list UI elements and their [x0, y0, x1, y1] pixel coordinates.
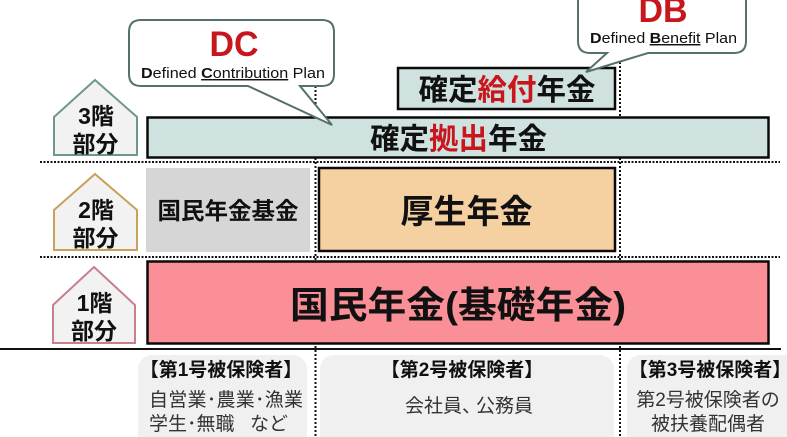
text: 第3号 description: 第2号被保険者の — [636, 389, 780, 411]
icon: house label 2階部分 — [54, 174, 137, 251]
box: 国民年金(基礎年金): 国民年金(基礎年金) — [290, 285, 626, 326]
icon: house label 1階部分 — [53, 267, 135, 344]
heading: 第1号被保険者: 【第1号被保険者】 — [140, 359, 302, 381]
text: 第1号 occupations: など — [250, 413, 288, 435]
panel: 3rd tier — [54, 68, 768, 158]
box: 確定給付年金 — [398, 68, 615, 109]
box: 確定給付年金: 確定給付年金 — [418, 74, 596, 107]
callout: DB — [578, 0, 746, 72]
text: 第2号 occupations: 会社員、 — [405, 396, 481, 417]
panel: 2nd tier — [54, 168, 615, 252]
box: 確定拠出年金: 確定拠出年金 — [370, 123, 547, 156]
text: 第1号 occupations: 学生･無職 — [149, 414, 235, 435]
callout: DC: DC — [210, 25, 258, 64]
callout: DC: Defined Contribution Plan — [141, 66, 325, 82]
box: 国民年金(基礎年金) — [148, 262, 768, 344]
panel: 第2号被保険者 — [320, 355, 614, 437]
text: 第3号 description: 被扶養配偶者 — [651, 413, 765, 435]
text: 第1号 occupations — [149, 389, 303, 435]
box: 確定拠出年金 — [148, 118, 768, 158]
box: 厚生年金 — [319, 168, 615, 251]
icon: house label 2階部分: 2階 — [78, 197, 114, 223]
icon: house label 1階部分: 1階 — [77, 290, 112, 316]
text: 第1号 occupations: 自営業･農業･漁業 — [149, 389, 303, 411]
heading: 第2号被保険者: 【第2号被保険者】 — [381, 359, 543, 381]
text: 第2号 occupations: 公務員 — [476, 395, 533, 417]
box: 国民年金基金: 国民年金基金 — [158, 198, 299, 224]
panel: 1st tier — [53, 262, 768, 344]
icon: house label 3階部分: 3階 — [78, 103, 114, 129]
callout: DC — [129, 20, 334, 125]
text: 第3号 description — [636, 389, 780, 435]
icon: house label 1階部分: 部分 — [71, 318, 117, 344]
box: 国民年金基金 — [146, 168, 310, 252]
icon: house label 3階部分: 部分 — [72, 131, 118, 157]
callout: DB: Defined Benefit Plan — [590, 31, 737, 47]
icon: house label 2階部分: 部分 — [72, 225, 118, 251]
heading: 第3号被保険者: 【第3号被保険者】 — [629, 359, 787, 381]
icon: house label 3階部分 — [54, 80, 137, 157]
panel: 第3号被保険者 — [627, 355, 787, 437]
panel: 第1号被保険者 — [138, 355, 307, 437]
box: 厚生年金: 厚生年金 — [400, 193, 532, 230]
